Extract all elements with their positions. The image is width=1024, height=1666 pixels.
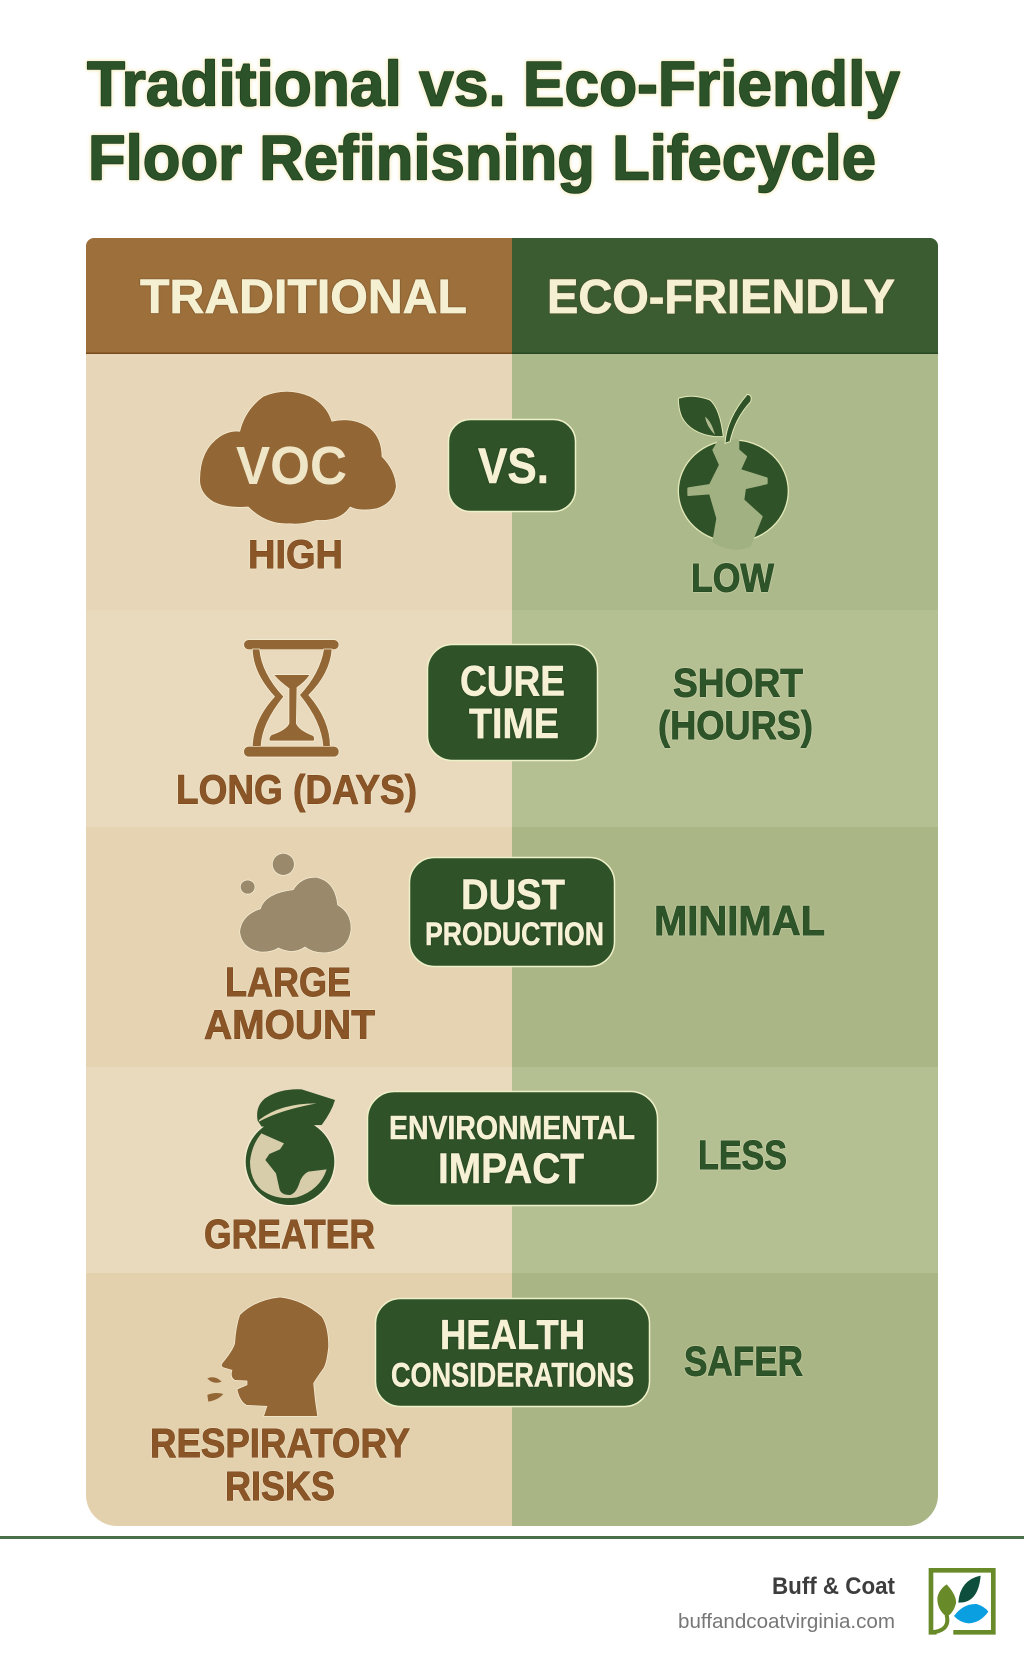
icon: brand logo: [931, 1570, 993, 1632]
label: respiratory risks: [150, 1420, 410, 1509]
icon: globe with leaf: [245, 1089, 335, 1206]
header: eco-friendly: ECO-FRIENDLY: [547, 271, 895, 324]
title: Floor Refinisning Lifecycle: [88, 124, 876, 194]
label: respiratory risks: RISKS: [225, 1463, 335, 1509]
header: eco-friendly: [512, 238, 938, 354]
label: short (hours): [658, 662, 813, 748]
footer brand text: Buff & Coat: [772, 1573, 895, 1600]
badge: cure time: [428, 644, 598, 760]
label: large amount: LARGE: [225, 959, 351, 1005]
label: long (days): LONG (DAYS): [176, 766, 417, 812]
icon: VOC cloud: [200, 392, 396, 524]
badge: cure time: TIME: [469, 700, 559, 748]
badge: environmental impact: ENVIRONMENTAL: [389, 1109, 635, 1146]
badge: dust production: PRODUCTION: [425, 916, 604, 952]
badge: health considerations: HEALTH: [440, 1311, 585, 1358]
title: Traditional vs. Eco-Friendly: [87, 50, 900, 120]
footer brand text: [678, 1573, 895, 1633]
panel: comparison table: [86, 238, 938, 1526]
label: large amount: [204, 959, 375, 1048]
header: traditional: [86, 238, 512, 354]
icon: hourglass: [244, 640, 339, 757]
label: minimal: MINIMAL: [654, 897, 825, 944]
label: short (hours): (HOURS): [658, 704, 813, 748]
label: large amount: AMOUNT: [204, 1002, 375, 1048]
label: high VOC: HIGH: [248, 533, 343, 577]
icon: VOC cloud: VOC: [236, 436, 347, 496]
label: less: LESS: [698, 1132, 787, 1178]
badge: environmental impact: IMPACT: [438, 1145, 584, 1193]
header: traditional: TRADITIONAL: [140, 271, 467, 324]
badge: cure time: CURE: [460, 658, 565, 706]
label: respiratory risks: RESPIRATORY: [150, 1420, 410, 1466]
label: short (hours): SHORT: [673, 662, 803, 706]
label: low VOC: LOW: [691, 556, 774, 600]
footer brand text: buffandcoatvirginia.com: [678, 1611, 895, 1633]
badge: health considerations: CONSIDERATIONS: [391, 1356, 634, 1394]
label: safer: SAFER: [684, 1338, 803, 1384]
badge: environmental impact: [368, 1092, 658, 1206]
icon: head with breath droplets: [207, 1297, 328, 1416]
badge: vs: VS.: [478, 438, 549, 494]
badge: health considerations: [376, 1298, 650, 1406]
panel: table rows background: [86, 353, 938, 1526]
badge: dust production: [410, 858, 614, 966]
icon: dust cloud: [240, 854, 351, 952]
badge: dust production: DUST: [461, 871, 565, 919]
label: greater: GREATER: [204, 1211, 375, 1257]
icon: globe with sprout: [678, 394, 788, 549]
title: [87, 50, 900, 194]
badge: vs: [448, 420, 576, 512]
